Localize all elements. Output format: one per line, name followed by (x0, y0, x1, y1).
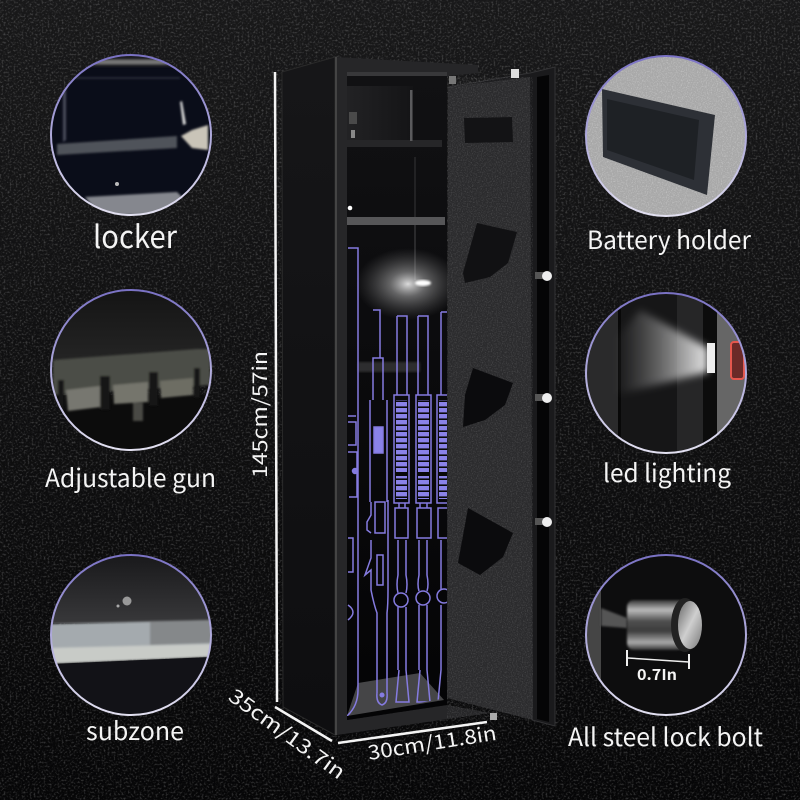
lock bolt ring (586, 555, 746, 715)
interior shelf (347, 157, 445, 280)
locker ring (51, 55, 211, 215)
lock bolts on door (535, 271, 552, 527)
door outer edge (448, 67, 555, 726)
LED light glow (356, 248, 460, 320)
battery holder ring (586, 56, 746, 216)
panel: adjustable gun (45, 290, 216, 495)
battery holder photo (586, 56, 746, 216)
panel: led lighting (586, 293, 747, 490)
bolt dimension (627, 650, 689, 685)
door pocket 3 (458, 508, 513, 575)
led lighting label: led lighting (603, 454, 731, 490)
adjustable gun ring (51, 290, 211, 450)
locker label: locker (93, 212, 178, 257)
gun 4 (416, 316, 431, 702)
gun safe illustration (282, 57, 555, 735)
interior lock box (347, 86, 442, 147)
open door (447, 67, 555, 726)
gun 5 (436, 311, 447, 700)
depth dimension: 35cm/13.7in (223, 680, 352, 785)
hinges (449, 69, 519, 720)
door dark channel (537, 75, 549, 722)
gun outlines (347, 248, 452, 716)
height dimension: 145cm/57in (244, 351, 273, 478)
panel: all steel lock bolt (568, 555, 764, 754)
locker photo (51, 55, 211, 215)
panel: battery holder (586, 56, 751, 257)
gun 3 (394, 316, 409, 702)
hazy gun rack (358, 362, 420, 372)
lock bolt label: All steel lock bolt (568, 718, 764, 754)
lock bolt photo (586, 555, 746, 715)
carpet floor (347, 673, 444, 716)
adjustable gun rack photo (51, 290, 211, 450)
battery holder label: Battery holder (587, 221, 751, 257)
door felt lining (447, 77, 533, 720)
safe side panel (282, 57, 335, 735)
gun 2 (365, 310, 388, 705)
subzone shelf photo (50, 555, 212, 716)
led lighting ring (586, 293, 746, 453)
adjustable gun label: Adjustable gun (45, 459, 216, 495)
safe interior (347, 76, 447, 720)
door pocket 1 (463, 223, 517, 283)
subzone label: subzone (86, 712, 184, 748)
bolt dimension: 0.7In (637, 664, 677, 685)
subzone ring (51, 555, 211, 715)
door pocket 2 (463, 368, 513, 427)
safe front frame (335, 57, 490, 735)
panel: locker (51, 55, 211, 257)
gun 1 (347, 248, 358, 716)
battery pocket on door (464, 117, 513, 143)
led lighting photo (586, 293, 747, 453)
width dimension: 30cm/11.8in (365, 717, 498, 766)
panel: subzone (50, 555, 212, 748)
